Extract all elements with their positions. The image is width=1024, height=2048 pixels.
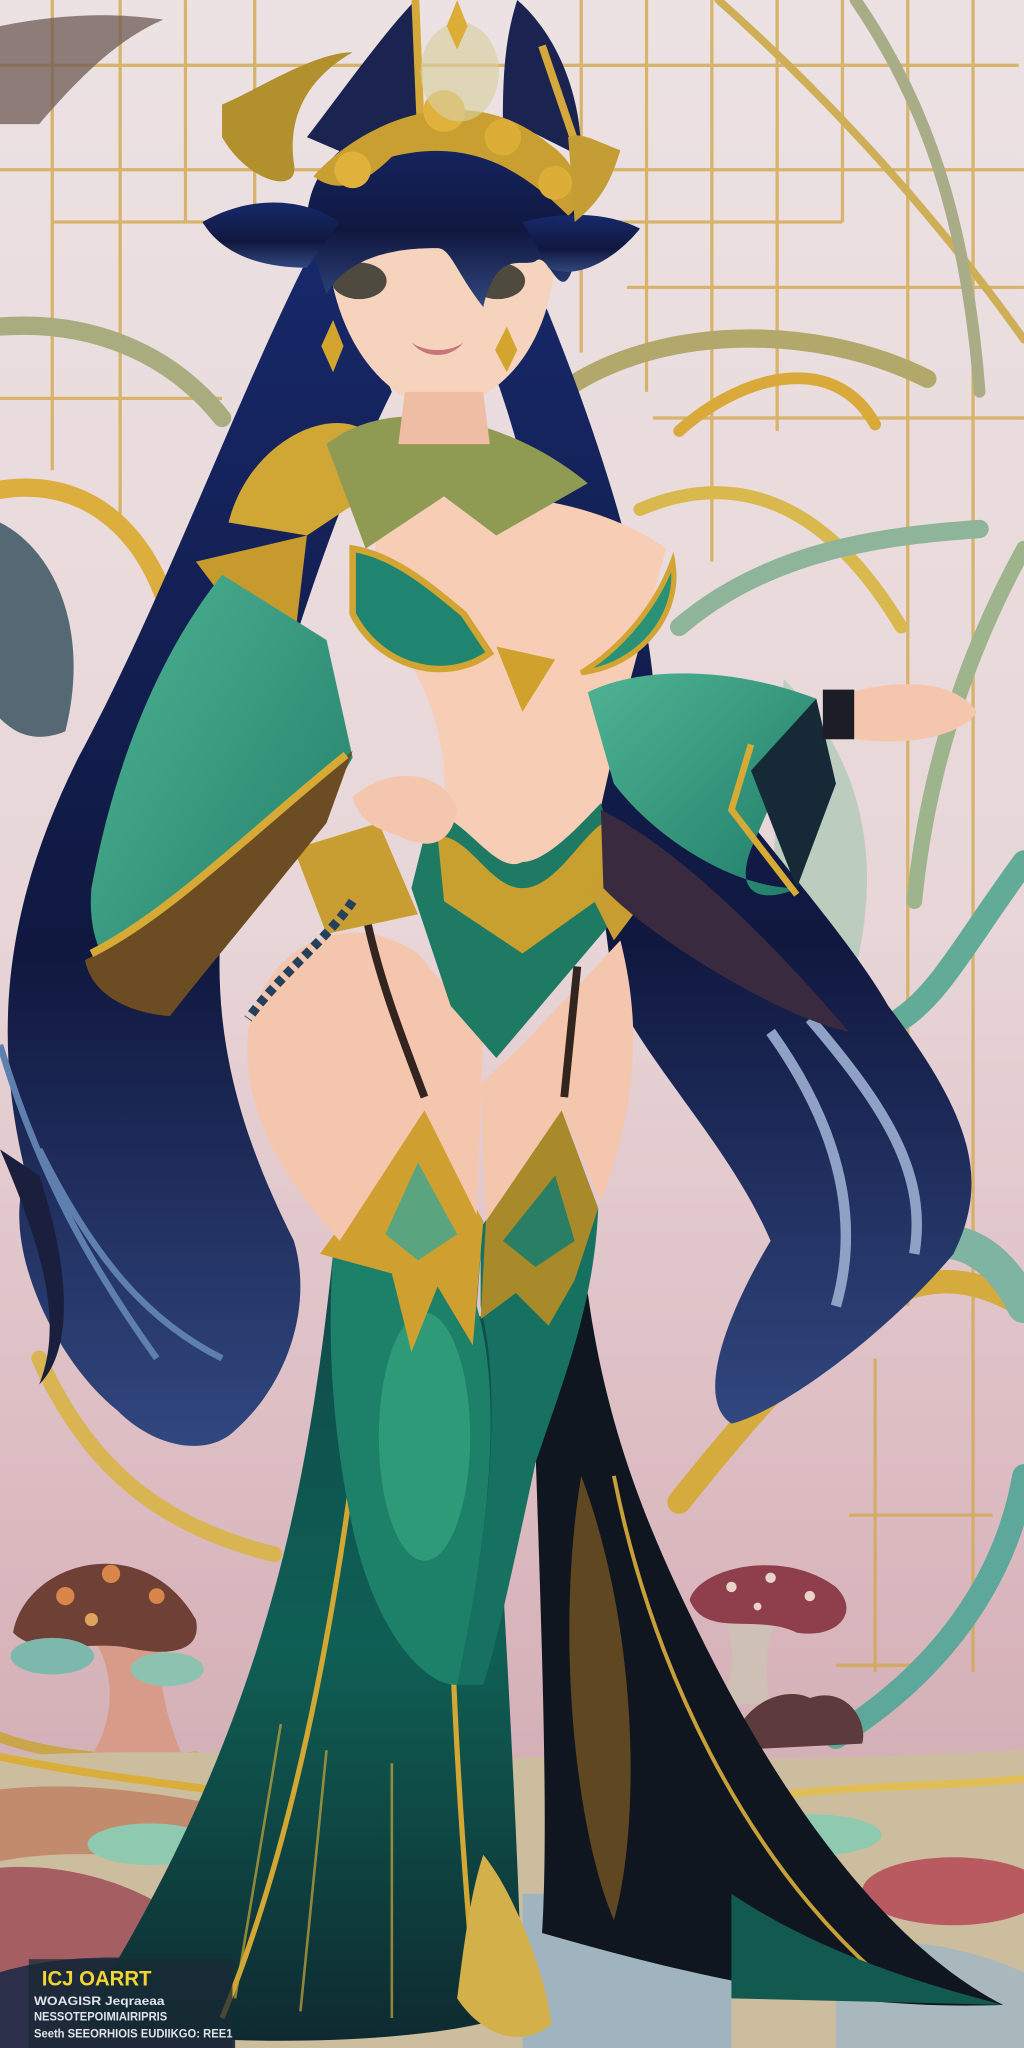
pale green block right [771,679,867,993]
ornate gold stocking tops [320,1110,598,1352]
green bodice [294,549,674,1058]
caption line two: NESSOTEPOIMIAIRIPRIS [34,2011,167,2024]
outstretched hand [823,684,977,741]
garter straps [366,914,577,1097]
caption heading: ICJ OARRT [42,1967,152,1990]
mushroom right [690,1565,863,1750]
golden shoe [457,1855,551,2037]
neck [398,392,490,444]
golden earrings [321,320,517,372]
eyes [332,263,387,299]
caption line one: WOAGISR Jeqraeaa [34,1995,165,2008]
right sleeve [588,673,849,1032]
legs [247,932,633,1241]
left sleeve [85,575,353,1016]
gold dangling chain [248,901,353,1019]
mushroom left [10,1564,204,1757]
head and face [326,162,556,444]
gold shoulder armour [196,416,588,647]
fringe and hair top [202,117,640,307]
green stockings [331,1123,598,1685]
mouth [411,342,464,355]
hand on hip [353,776,457,844]
caption line three: Seeth SEEORHIOIS EUDIIKGO: REE1 [34,2028,233,2041]
fox ears [307,0,581,157]
long dark hair [0,222,971,1446]
caption backing [29,1959,232,2048]
caption [29,1959,233,2048]
gold floral crown [222,0,620,222]
dark leaves upper left [0,15,163,124]
gown skirt right panel [536,1293,1003,2006]
floor [0,1750,1024,2048]
gown skirt left panel [78,1254,522,2041]
dark leaves left [0,522,74,737]
bare midriff [366,496,666,914]
